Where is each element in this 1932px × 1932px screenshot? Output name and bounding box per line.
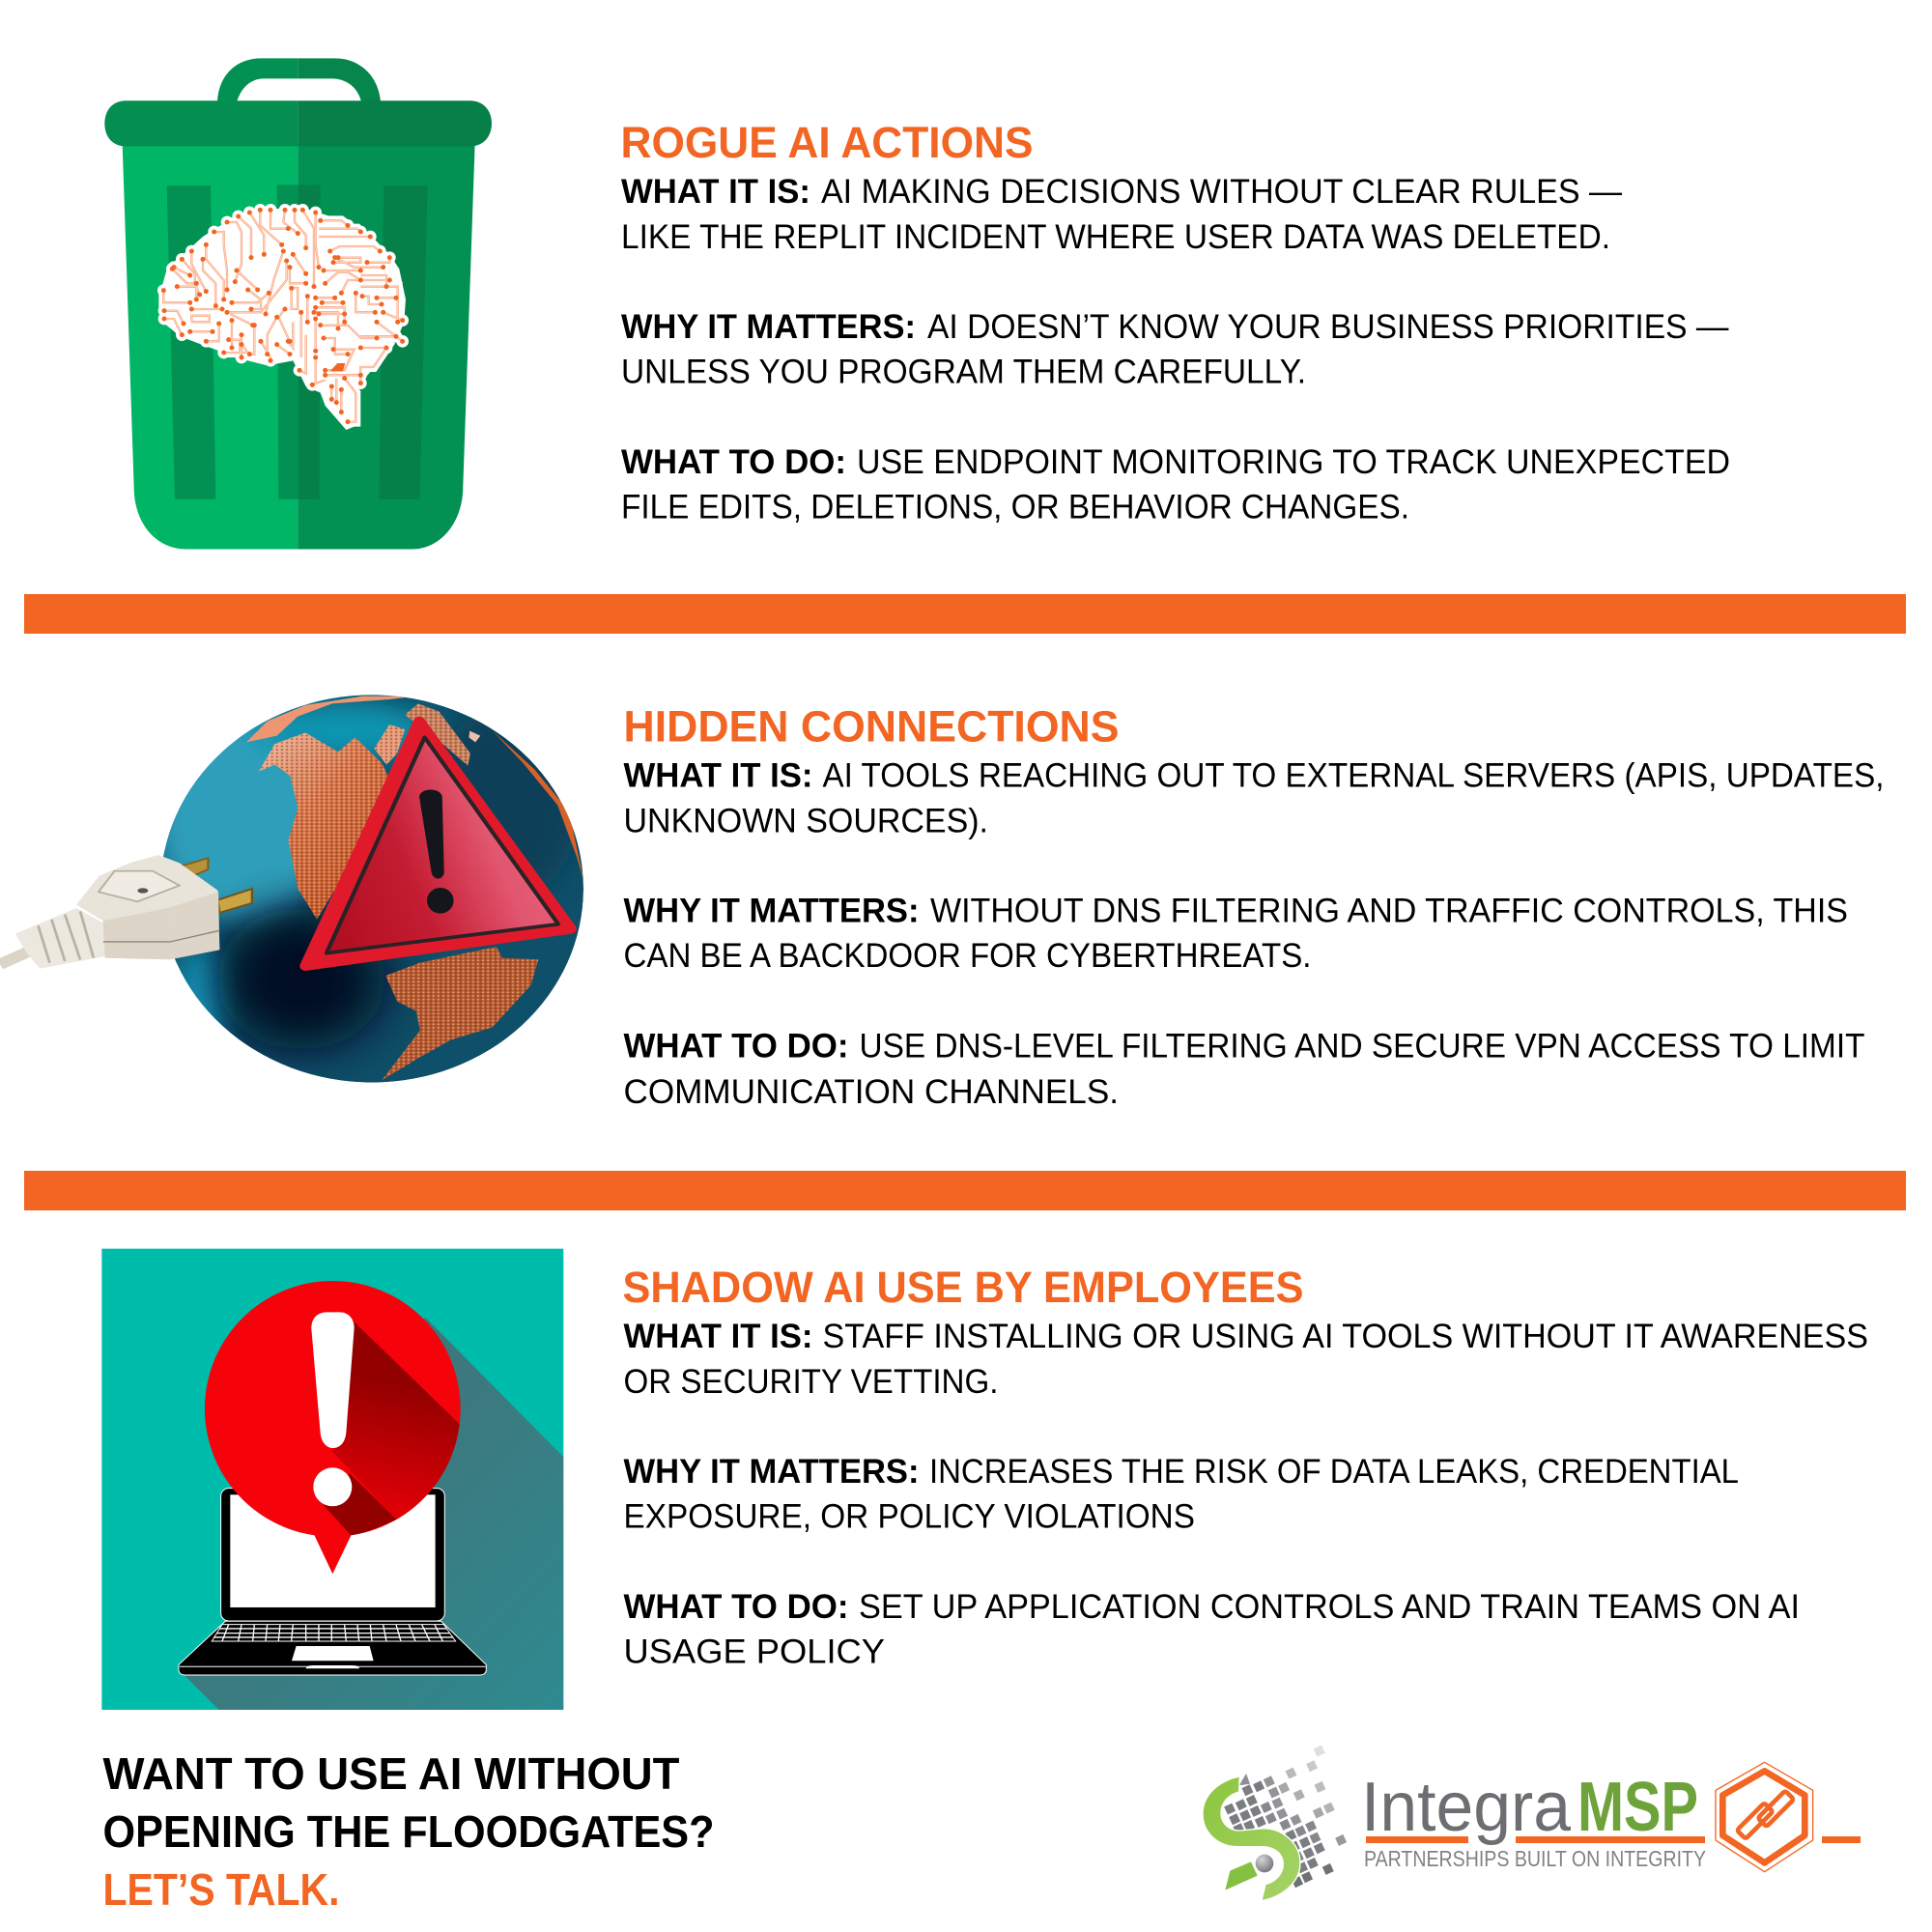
what to do	[624, 1028, 1864, 1111]
heading: SHADOW AI USE BY EMPLOYEES	[622, 1263, 1304, 1312]
why it matters: UNLESS YOU PROGRAM THEM CAREFULLY.	[621, 354, 1306, 390]
what to do: SET UP APPLICATION CONTROLS AND TRAIN TEAMS ON AI	[859, 1588, 1800, 1626]
power plug and cord	[0, 855, 252, 969]
logo mark: pixel squares and green S	[1203, 1746, 1347, 1901]
orange underline	[1366, 1836, 1861, 1843]
what it is: STAFF INSTALLING OR USING AI TOOLS WITHOUT IT AWARENESS	[823, 1318, 1868, 1355]
section text: shadow AI use by employees	[622, 1263, 1868, 1671]
red alert bubble	[205, 1281, 462, 1574]
call to action	[102, 1748, 715, 1915]
what to do: WHAT TO DO:	[624, 1028, 848, 1065]
what to do: FILE EDITS, DELETIONS, OR BEHAVIOR CHANGES.	[621, 489, 1409, 526]
call to action: WANT TO USE AI WITHOUT	[102, 1748, 680, 1799]
orange divider one	[24, 594, 1906, 634]
what to do: WHAT TO DO:	[621, 443, 846, 481]
why it matters: WHY IT MATTERS:	[621, 308, 916, 346]
wordmark MSP: MSP	[1577, 1769, 1698, 1846]
long shadow	[182, 1317, 563, 1710]
laptop	[179, 1489, 486, 1675]
why it matters	[624, 1453, 1739, 1536]
why it matters: AI DOESN’T KNOW YOUR BUSINESS PRIORITIES —	[927, 308, 1729, 346]
what to do: USE DNS-LEVEL FILTERING AND SECURE VPN ACCESS TO LIMIT	[860, 1028, 1864, 1065]
what it is: WHAT IT IS:	[621, 173, 810, 211]
why it matters	[621, 308, 1729, 390]
trash can artwork	[104, 58, 492, 550]
what it is	[624, 1318, 1868, 1401]
why it matters: EXPOSURE, OR POLICY VIOLATIONS	[624, 1497, 1195, 1536]
teal tile background	[101, 1249, 563, 1710]
what to do: USAGE POLICY	[624, 1633, 885, 1671]
what to do	[621, 443, 1730, 526]
icon: laptop with red alert bubble on teal tile	[101, 1249, 563, 1710]
why it matters	[624, 893, 1848, 975]
what it is: LIKE THE REPLIT INCIDENT WHERE USER DATA WAS DELETED.	[621, 218, 1610, 256]
section text: hidden connections	[624, 701, 1884, 1111]
what to do: USE ENDPOINT MONITORING TO TRACK UNEXPECTED	[857, 443, 1730, 481]
why it matters: WITHOUT DNS FILTERING AND TRAFFIC CONTROLS, THIS	[930, 893, 1848, 929]
what it is: AI TOOLS REACHING OUT TO EXTERNAL SERVERS (APIS, UPDATES,	[823, 757, 1884, 794]
logo: IntegraMSP	[1203, 1746, 1861, 1901]
what to do: WHAT TO DO:	[624, 1588, 848, 1626]
heading: HIDDEN CONNECTIONS	[624, 701, 1119, 752]
heading: ROGUE AI ACTIONS	[620, 118, 1034, 167]
why it matters: WHY IT MATTERS:	[624, 1453, 920, 1491]
continent: north america	[259, 703, 470, 920]
icon: globe with warning triangle and unplugged cord	[0, 695, 584, 1083]
why it matters: CAN BE A BACKDOOR FOR CYBERTHREATS.	[624, 937, 1312, 975]
circuit brain	[161, 209, 406, 430]
what to do	[624, 1588, 1800, 1671]
what to do: COMMUNICATION CHANNELS.	[624, 1073, 1119, 1111]
hexagon link badge	[1716, 1762, 1813, 1872]
icon: green trash can with circuit brain	[104, 58, 492, 550]
what it is: WHAT IT IS:	[624, 757, 813, 794]
what it is: AI MAKING DECISIONS WITHOUT CLEAR RULES —	[821, 173, 1622, 211]
call to action: OPENING THE FLOODGATES?	[102, 1806, 715, 1857]
what it is	[621, 173, 1622, 256]
what it is	[624, 757, 1884, 840]
globe sphere	[153, 695, 584, 1083]
what it is: WHAT IT IS:	[624, 1318, 813, 1355]
orange divider two	[24, 1171, 1906, 1210]
why it matters: WHY IT MATTERS:	[624, 893, 920, 929]
section text: rogue AI actions	[620, 118, 1730, 526]
arctic and rim land	[246, 696, 584, 882]
wordmark Integra: Integra	[1361, 1769, 1572, 1846]
call to action: LET’S TALK.	[102, 1864, 340, 1915]
why it matters: INCREASES THE RISK OF DATA LEAKS, CREDENTIAL	[929, 1453, 1739, 1491]
warning triangle	[305, 722, 571, 966]
tagline: PARTNERSHIPS BUILT ON INTEGRITY	[1364, 1846, 1706, 1871]
what it is: OR SECURITY VETTING.	[624, 1363, 999, 1401]
continent: south america	[382, 947, 538, 1080]
what it is: UNKNOWN SOURCES).	[624, 802, 988, 840]
